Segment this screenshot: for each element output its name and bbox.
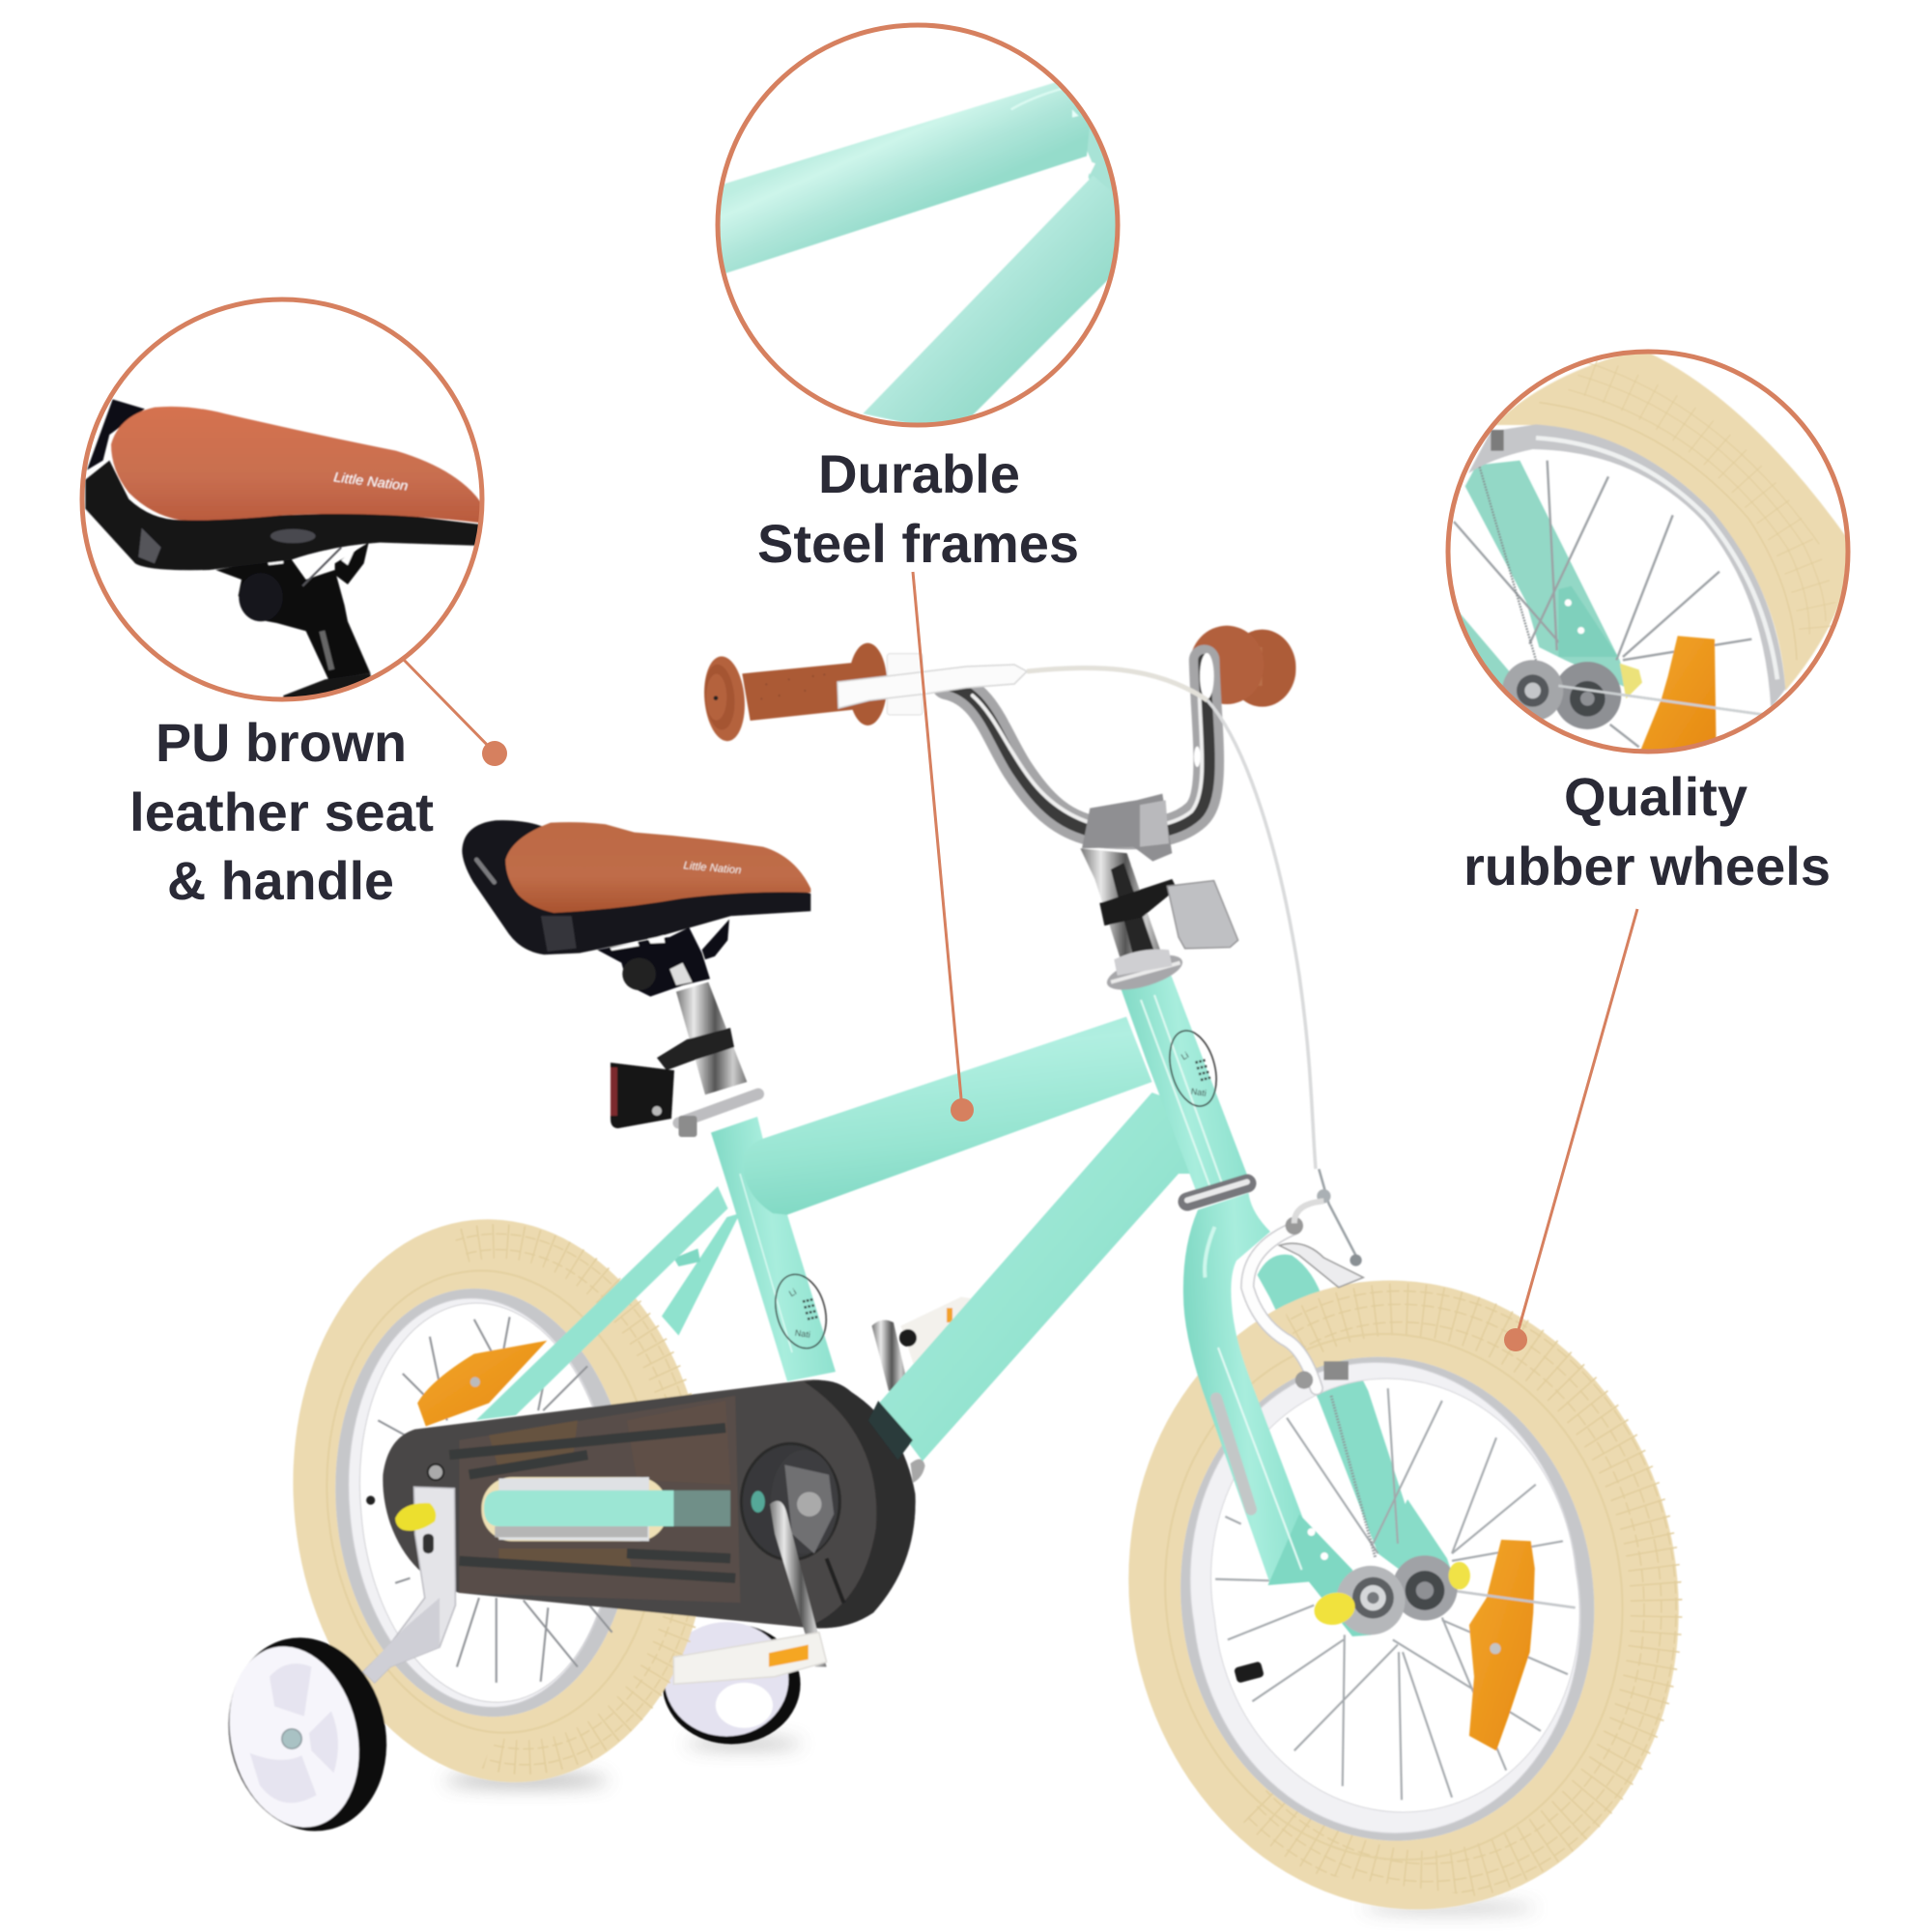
heading: wheel label (1463, 766, 1831, 896)
right grip (1190, 626, 1296, 707)
front wheel (1128, 1279, 1683, 1910)
left grip (701, 643, 887, 743)
far fork blade (1258, 1255, 1457, 1588)
bottom bracket hardware (910, 1460, 925, 1483)
heading: seat label (129, 712, 434, 911)
stay bridge (674, 1248, 700, 1266)
seat stay (476, 1186, 728, 1420)
reflector mount (1099, 879, 1177, 925)
heading: frame label: Steel frames (757, 513, 1079, 574)
seat tube logo: Nati (794, 1328, 810, 1340)
panel: frame close-up (715, 25, 1130, 428)
front reflector (1469, 1540, 1535, 1750)
seat close-up image (85, 399, 483, 705)
chain guard and drivetrain (210, 1379, 916, 1847)
near axle nut (1311, 1588, 1359, 1630)
seat tube logo: Li (787, 1287, 798, 1298)
ground shadows (444, 1739, 1536, 1912)
near training wheel (210, 1622, 406, 1847)
head tube logo: Nati (1190, 1087, 1207, 1098)
far axle nut (1448, 1562, 1470, 1589)
near pedal (673, 1633, 827, 1684)
training wheel bracket (363, 1487, 455, 1683)
bar clamp (1082, 794, 1172, 862)
rear reflector (417, 1341, 547, 1427)
rear spokes (378, 1317, 612, 1683)
down tube (879, 1093, 1190, 1461)
seat leather (111, 407, 483, 524)
handlebar and stem (887, 626, 1296, 997)
callout: wheel (1504, 909, 1637, 1351)
dot (951, 1098, 974, 1122)
callout: seat (404, 660, 507, 766)
far lever box (887, 654, 923, 715)
frame close-up image (715, 74, 1130, 428)
headset collar (1103, 948, 1186, 997)
wheel close-up image (1449, 353, 1852, 751)
seat brand: Little Nation (683, 860, 742, 877)
leader line (913, 572, 962, 1109)
top tube (744, 1016, 1151, 1215)
panel: seat close-up (82, 299, 483, 705)
front hub and brake (1247, 1169, 1470, 1634)
frame circle ring (718, 25, 1118, 425)
heading: wheel label: Quality (1564, 766, 1747, 827)
far training wheel (663, 1622, 801, 1745)
dot (482, 741, 507, 766)
heading: seat label: PU brown (156, 712, 407, 773)
bicycle photo (210, 626, 1723, 1932)
front reflector plate (1167, 881, 1238, 949)
sprocket (741, 1443, 839, 1560)
far hub (1392, 1555, 1458, 1621)
stem (1080, 848, 1162, 959)
training wheel nut (395, 1503, 436, 1531)
heading: frame label: Durable (818, 443, 1020, 504)
rear wheel (293, 1215, 727, 1784)
seat bracket (215, 557, 370, 679)
seat circle ring (82, 299, 482, 699)
frame tubes (476, 976, 1248, 1483)
chain stay (484, 1491, 673, 1526)
seat tube (711, 1117, 836, 1381)
seat post (676, 982, 747, 1094)
leader line (1516, 909, 1637, 1340)
head tube (1121, 976, 1248, 1196)
front spokes (1215, 1388, 1576, 1800)
front rim (1180, 1357, 1594, 1841)
rear rim (335, 1289, 633, 1717)
callout: frame (913, 572, 974, 1122)
seat base (85, 461, 483, 570)
heading: wheel label: rubber wheels (1463, 836, 1831, 896)
thin rear stay (662, 1213, 740, 1335)
seat leather (505, 822, 810, 913)
seat tube logo (768, 1268, 834, 1354)
seat clamp (678, 1094, 758, 1122)
front tire (1128, 1281, 1679, 1910)
dot (1504, 1328, 1527, 1351)
rear tire (293, 1219, 709, 1782)
head tube logo: Li (1179, 1050, 1190, 1062)
brake spring (1331, 1396, 1376, 1558)
chain guard slot (481, 1477, 668, 1541)
heading: frame label (757, 443, 1079, 574)
crank arm (770, 1501, 827, 1667)
seat clamp (597, 927, 710, 997)
leader line (404, 660, 496, 753)
panel: wheel close-up (1448, 352, 1852, 752)
front fork (1183, 1193, 1372, 1636)
chain guard (383, 1379, 916, 1629)
saddle (462, 820, 810, 1094)
near hub (1336, 1566, 1406, 1634)
heading: seat label: & handle (167, 850, 394, 911)
seat brand: Little Nation (333, 469, 410, 494)
rear light (611, 1028, 734, 1128)
head tube lower collar (1187, 1183, 1247, 1202)
wheel circle ring (1448, 352, 1848, 752)
head tube logo (1162, 1026, 1224, 1111)
far pedal (900, 1296, 976, 1377)
seat base (462, 820, 810, 954)
heading: seat label: leather seat (129, 781, 434, 842)
brake caliper (1247, 1228, 1317, 1388)
brake cable (1027, 668, 1316, 1169)
chrome bar (947, 660, 1208, 834)
brake lever (838, 665, 1027, 708)
